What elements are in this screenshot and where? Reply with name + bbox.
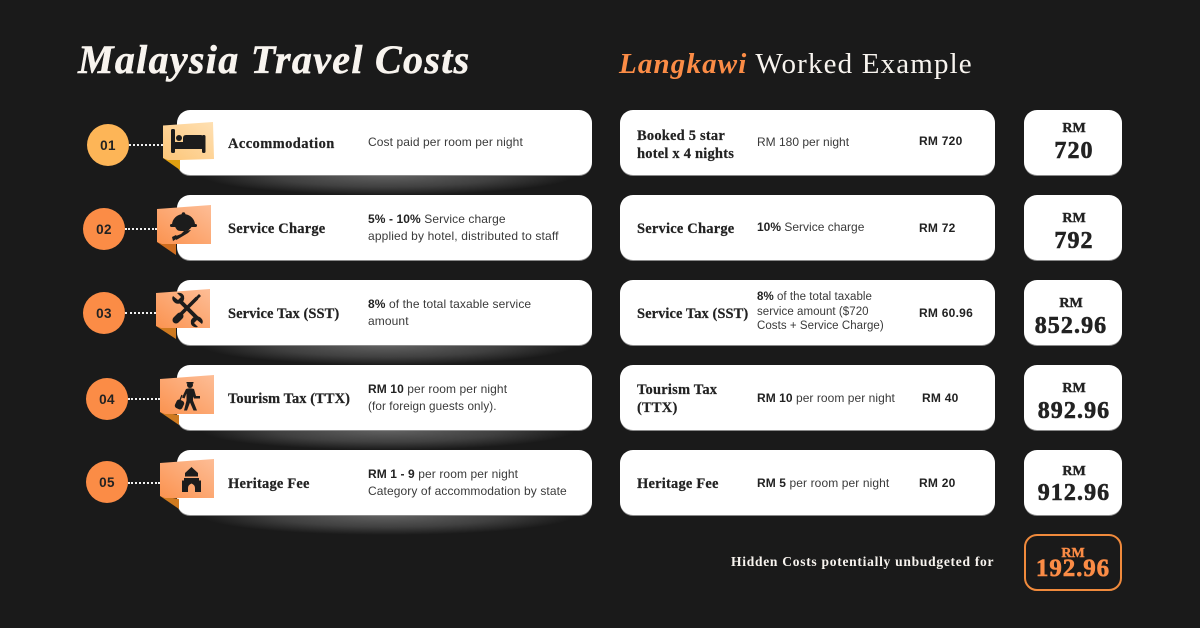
- description: accommodation: Cost paid per room per night: [368, 135, 523, 149]
- description: tourism tax: [368, 382, 507, 413]
- description: tourism tax: (for foreign guests only).: [368, 400, 497, 413]
- panel: worked example row 3: [620, 280, 995, 345]
- description: service charge: applied by hotel, distributed to staff: [368, 229, 559, 243]
- connector 03: [125, 312, 156, 314]
- running total 792: [1024, 195, 1122, 260]
- number badge 04: 04: [99, 392, 115, 407]
- card: service tax: [177, 280, 592, 345]
- card: service charge: [177, 195, 592, 260]
- number badge 05: 05: [99, 475, 115, 490]
- currency: RM: [1062, 211, 1086, 226]
- amount: RM 72: [919, 221, 956, 235]
- label: service tax: Service Tax (SST): [228, 306, 339, 322]
- label: heritage fee: Heritage Fee: [637, 476, 719, 492]
- label: booked hotel: [637, 128, 734, 162]
- description: service charge: [368, 212, 559, 243]
- description: service amount ($720: [757, 306, 869, 318]
- heading: Langkawi worked example: Langkawi Worked Example: [619, 48, 973, 80]
- value: 852.96: [1035, 313, 1107, 339]
- panel: worked example row 5: [620, 450, 995, 515]
- running total 852.96: [1024, 280, 1122, 345]
- number badge 03: 03: [96, 306, 112, 321]
- label: tourism tax: (TTX): [637, 400, 677, 416]
- number badge 01: 01: [100, 138, 116, 153]
- description: 8% of the total taxable: [757, 291, 872, 303]
- value: 912.96: [1038, 480, 1110, 506]
- label: booked hotel: hotel x 4 nights: [637, 146, 734, 162]
- title: Malaysia Travel Costs: [78, 37, 470, 82]
- panel: worked example row 4: [620, 365, 995, 430]
- running total 892.96: [1024, 365, 1122, 430]
- description: Costs + Service Charge): [757, 320, 884, 332]
- description: RM 5 per room per night: [757, 476, 889, 490]
- label: service charge: Service Charge: [637, 221, 734, 237]
- connector 04: [128, 398, 160, 400]
- value: 792: [1054, 228, 1094, 254]
- description: service tax: amount: [368, 314, 409, 328]
- description: 10% Service charge: [757, 220, 864, 234]
- label: tourism tax: Tourism Tax (TTX): [228, 391, 350, 407]
- label: accommodation: Accommodation: [228, 136, 335, 152]
- description: [757, 291, 884, 332]
- amount: RM 60.96: [919, 306, 973, 320]
- currency: RM: [1062, 121, 1086, 136]
- currency: RM: [1059, 296, 1083, 311]
- description: heritage fee: [368, 467, 567, 498]
- label: booked hotel: Booked 5 star: [637, 128, 725, 144]
- connector 05: [128, 482, 160, 484]
- card: tourism tax: [177, 365, 592, 430]
- icon: wrench and screwdriver: [156, 289, 210, 339]
- number badge 05: [86, 461, 128, 503]
- amount: RM 720: [919, 134, 963, 148]
- currency: RM: [1062, 381, 1086, 396]
- icon: bed: [163, 122, 214, 170]
- description: service tax: [368, 297, 531, 328]
- currency: RM: [1062, 464, 1086, 479]
- icon: serving cloche: [157, 205, 211, 255]
- label: tourism tax: Tourism Tax: [637, 382, 717, 398]
- panel: worked example row 1: [620, 110, 995, 175]
- icon: mosque: [160, 459, 214, 509]
- card: accommodation: [177, 110, 592, 175]
- description: RM 10 per room per night: [757, 391, 895, 405]
- card: heritage fee: [177, 450, 592, 515]
- value: 720: [1054, 138, 1094, 164]
- currency: RM: [1061, 546, 1085, 561]
- value: 192.96: [1036, 555, 1110, 582]
- description: service tax: 8% of the total taxable service: [368, 297, 531, 311]
- label: heritage fee: Heritage Fee: [228, 476, 310, 492]
- icon: traveller with suitcase: [160, 375, 214, 425]
- description: service charge: 5% - 10% Service charge: [368, 212, 506, 226]
- amount: RM 20: [919, 476, 956, 490]
- description: heritage fee: RM 1 - 9 per room per night: [368, 467, 518, 481]
- amount: RM 40: [922, 391, 959, 405]
- description: heritage fee: Category of accommodation by state: [368, 484, 567, 498]
- description: RM 180 per night: [757, 135, 849, 149]
- hidden costs caption: Hidden Costs potentially unbudgeted for: [731, 554, 994, 569]
- connector 01: [129, 144, 163, 146]
- label: service charge: Service Charge: [228, 221, 325, 237]
- label: tourism tax: [637, 382, 717, 416]
- value: 892.96: [1038, 398, 1110, 424]
- number badge 02: 02: [96, 222, 112, 237]
- number badge 04: [86, 378, 128, 420]
- number badge 02: [83, 208, 125, 250]
- number badge 01: [87, 124, 129, 166]
- connector 02: [125, 228, 157, 230]
- label: service tax: Service Tax (SST): [637, 306, 748, 322]
- running total 720: [1024, 110, 1122, 175]
- running total 912.96: [1024, 450, 1122, 515]
- description: tourism tax: RM 10 per room per night: [368, 382, 507, 396]
- hidden costs total: [1024, 534, 1122, 591]
- number badge 03: [83, 292, 125, 334]
- panel: worked example row 2: [620, 195, 995, 260]
